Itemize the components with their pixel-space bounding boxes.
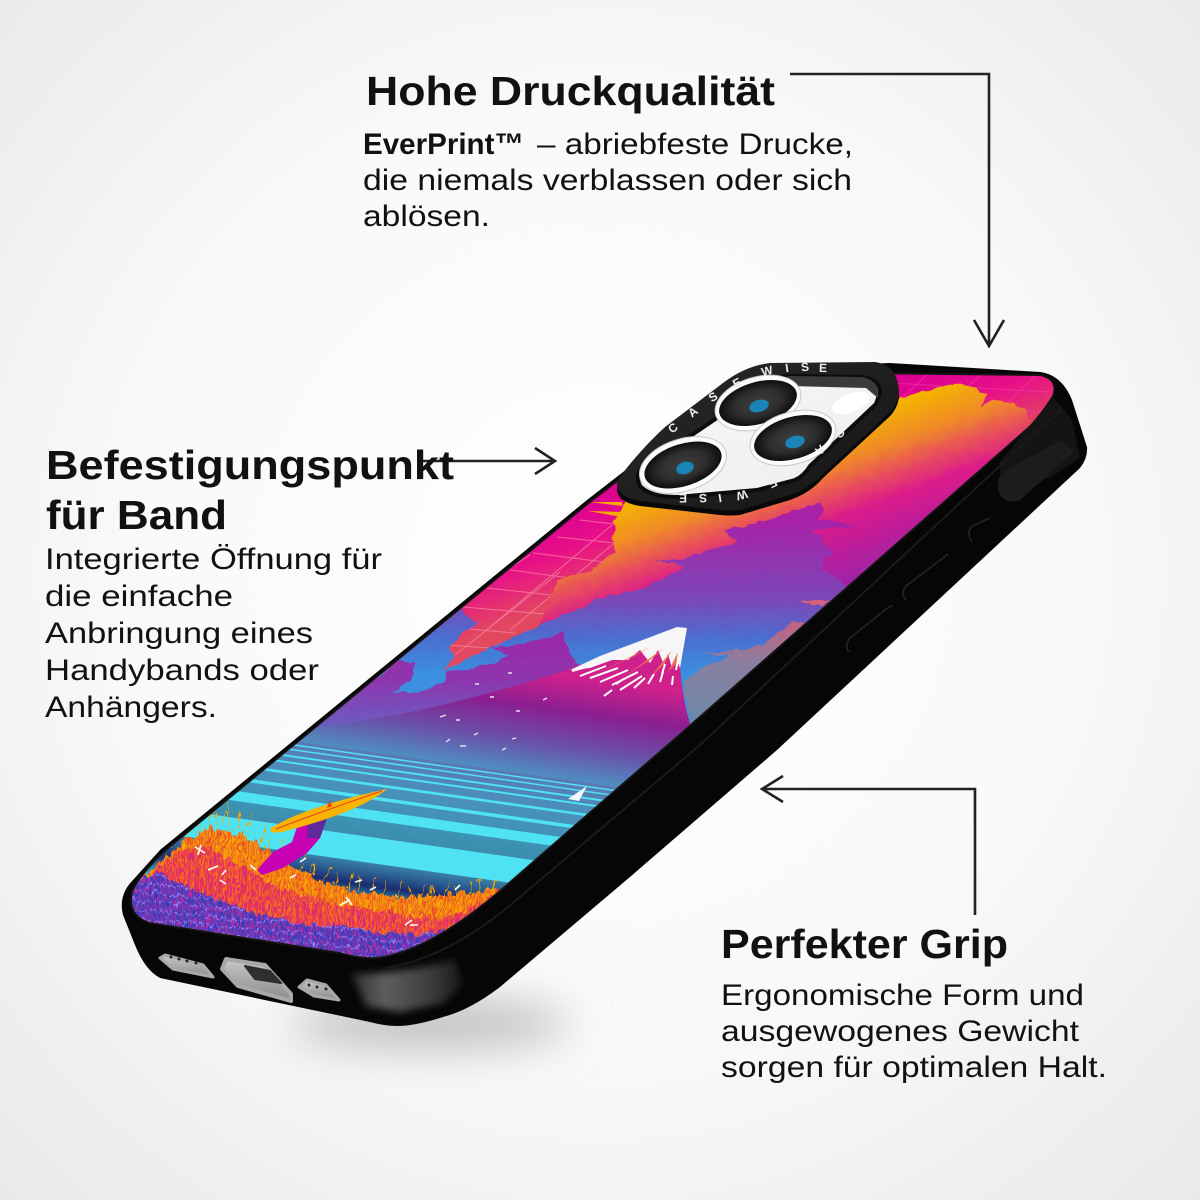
white flowers	[195, 845, 460, 925]
brand ring lettering: A	[812, 442, 828, 458]
heading: lanyard attachment: Befestigungspunkt	[46, 442, 454, 488]
body: print quality: ablösen.	[363, 200, 490, 233]
heading: lanyard attachment: für Band	[46, 492, 227, 538]
camera bump base	[617, 368, 899, 516]
body: lanyard attachment: Anhängers.	[45, 691, 217, 724]
side buttons	[847, 518, 990, 652]
body: print quality: die niemals verblassen oder sich	[363, 164, 852, 197]
brand ring lettering: A	[685, 404, 701, 420]
phone artwork	[132, 374, 1054, 958]
brand ring lettering: E	[730, 375, 744, 391]
grass orange layer	[140, 824, 499, 924]
brand ring lettering: W	[760, 363, 775, 379]
phone case body	[122, 363, 1087, 1026]
flash	[829, 387, 873, 419]
snow rays	[572, 646, 678, 696]
phone shadow	[290, 1000, 570, 1048]
usb port	[222, 959, 291, 1001]
callout: grip	[721, 921, 1107, 1084]
distant cloud streak	[800, 600, 830, 606]
body: grip: ausgewogenes Gewicht	[721, 1015, 1080, 1048]
lens top	[709, 366, 807, 440]
brand ring lettering	[665, 360, 848, 505]
cloud layers	[200, 383, 1045, 800]
lanyard slot	[998, 440, 1074, 502]
grid sky	[132, 374, 1054, 958]
grass field	[132, 801, 499, 958]
heading: lanyard attachment	[46, 442, 454, 538]
grass purple layer	[132, 870, 458, 958]
brand ring lettering: E	[819, 361, 827, 375]
body: grip: sorgen für optimalen Halt.	[721, 1051, 1107, 1084]
brand ring lettering: E	[679, 491, 687, 505]
sea base	[134, 742, 617, 932]
front rim	[132, 373, 1053, 957]
brand ring lettering: S	[706, 389, 720, 405]
callout: lanyard attachment	[45, 442, 454, 724]
grid lines	[440, 372, 1050, 655]
body: lanyard attachment: Integrierte Öffnung für	[45, 543, 382, 576]
heading: print quality: Hohe Druckqualität	[366, 68, 775, 114]
case ridge line	[385, 408, 1062, 968]
volume button lower	[847, 606, 893, 652]
case corner highlight	[352, 960, 462, 1012]
body: grip	[721, 979, 1107, 1084]
body: lanyard attachment: Handybands oder	[45, 654, 319, 687]
window top shade	[772, 376, 878, 398]
body: lanyard attachment: Anbringung eines	[45, 617, 313, 650]
camera bump face	[617, 362, 899, 510]
mountain and planet	[217, 627, 690, 840]
lens left	[632, 426, 734, 504]
sea	[134, 742, 617, 932]
arrow: print quality	[790, 74, 1004, 346]
orange cloud	[539, 384, 1032, 626]
body: grip: Ergonomische Form und	[721, 979, 1084, 1012]
brand ring lettering: S	[800, 360, 810, 374]
body: lanyard attachment: die einfache	[45, 580, 233, 613]
mountain snow	[570, 627, 687, 670]
body: print quality: – abriebfeste Drucke,	[537, 128, 853, 161]
brand ring lettering: C	[665, 420, 681, 436]
sea light bands	[184, 744, 615, 882]
body: lanyard attachment	[45, 543, 382, 724]
phone	[100, 350, 1100, 1026]
birds	[440, 673, 547, 750]
brand ring lettering: W	[734, 487, 749, 503]
body: print quality	[363, 128, 853, 233]
yellow sun streaks	[588, 502, 622, 517]
brand ring lettering: E	[766, 475, 780, 491]
surfer	[257, 818, 327, 875]
grey cloud	[683, 621, 805, 724]
sailboat	[568, 786, 587, 801]
grass blades	[170, 802, 496, 898]
heading: grip: Perfekter Grip	[721, 921, 1008, 967]
grass red layer	[152, 845, 496, 938]
brand ring lettering: I	[784, 361, 790, 375]
brand ring lettering: S	[793, 460, 807, 476]
action button	[969, 518, 990, 542]
arrow: grip	[762, 776, 975, 915]
case right side sheen	[1000, 396, 1080, 490]
callout: print quality	[363, 68, 853, 233]
surfboard	[270, 789, 387, 833]
speaker right	[299, 980, 339, 1000]
purple cloud	[280, 631, 580, 758]
brand ring lettering: I	[717, 491, 723, 505]
volume button upper	[903, 554, 948, 600]
arrow: lanyard attachment	[420, 448, 555, 474]
camera bump	[617, 360, 899, 516]
camera window	[638, 376, 880, 497]
brand ring lettering: C	[832, 425, 848, 441]
brand ring lettering: S	[699, 491, 707, 505]
lens right	[744, 401, 842, 475]
body: print quality: EverPrint™	[363, 128, 524, 161]
surfer shade	[307, 818, 327, 838]
blue purple cloud	[200, 501, 858, 800]
speaker left	[160, 955, 213, 977]
